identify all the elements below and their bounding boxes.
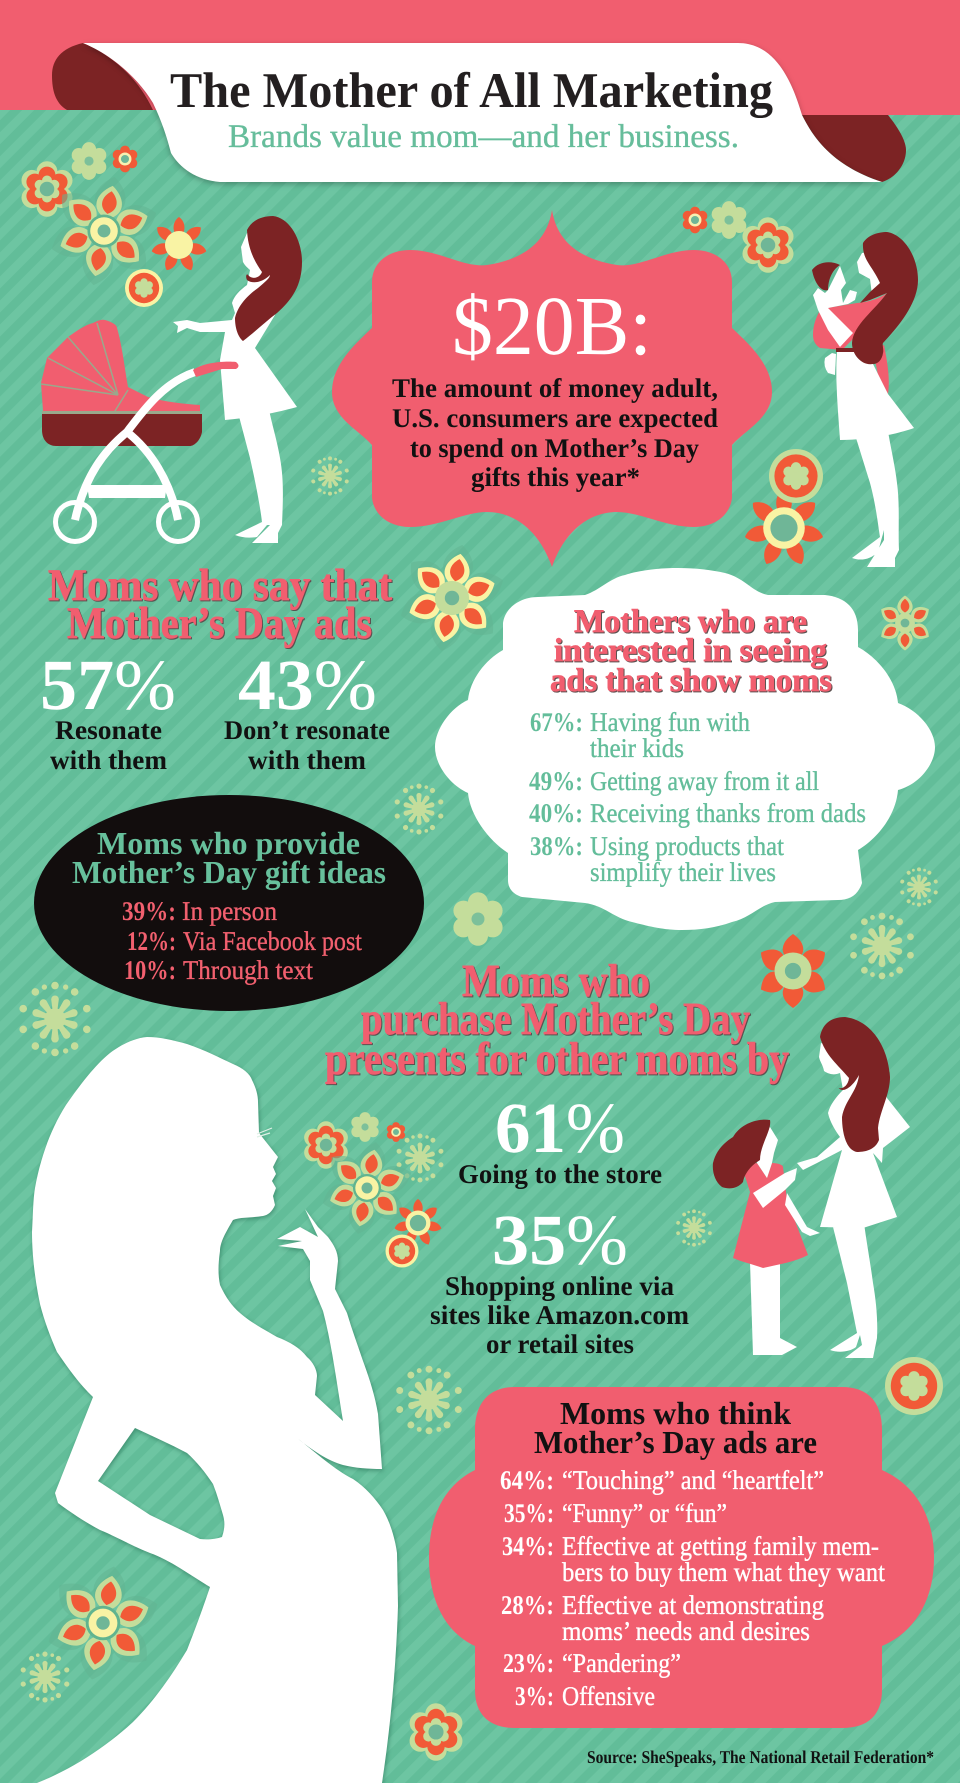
list (122, 896, 362, 985)
stroller (41, 320, 238, 542)
list: 3%: (515, 1681, 554, 1711)
flowers: top right cluster (683, 201, 794, 273)
list: 40%: (529, 798, 583, 828)
heading: Moms who think (560, 1395, 791, 1431)
stat: 61% (458, 1088, 662, 1189)
icon: eyelash (257, 1128, 272, 1137)
list: their kids (590, 733, 684, 763)
list: Effective at demonstrating (562, 1590, 824, 1620)
disc flower right (885, 1357, 943, 1415)
list: 38%: (530, 831, 583, 861)
heading: Moms who provide (97, 825, 360, 861)
list: Getting away from it all (590, 766, 819, 796)
woman holding baby (812, 232, 918, 567)
description: U.S. consumers are expected (392, 403, 718, 433)
plaque: $20B (332, 210, 772, 567)
list: 49%: (529, 766, 583, 796)
woman with stroller (41, 216, 302, 543)
stat: 61%: 61% (495, 1088, 625, 1168)
heading: moms who say: Mother’s Day ads (67, 598, 372, 648)
stat: 43%: 43% (238, 645, 377, 725)
list: Effective at getting family mem- (562, 1531, 879, 1561)
list: 35%: (504, 1498, 554, 1528)
mother and daughter (713, 1017, 910, 1358)
list: “Touching” and “heartfelt” (562, 1465, 824, 1495)
description: gifts this year* (471, 462, 640, 492)
list: simplify their lives (590, 857, 776, 887)
flowers: top left cluster (21, 142, 208, 307)
list: bers to buy them what they want (562, 1557, 885, 1587)
heading: moms who purchase: presents for other moms by (325, 1033, 789, 1084)
stat: 61%: Going to the store (458, 1159, 662, 1189)
heading: moms who purchase: Moms who (462, 955, 650, 1006)
silhouette: pregnant woman (32, 1037, 398, 1783)
description: to spend on Mother’s Day (410, 433, 699, 463)
list: 10%: (124, 955, 176, 985)
decorative burst (311, 456, 349, 496)
list: moms’ needs and desires (562, 1616, 810, 1646)
subtitle: Brands value mom—and her business. (228, 119, 739, 155)
stat: 35% (430, 1200, 690, 1359)
list: 28%: (501, 1590, 554, 1620)
heading: moms who say: Moms who say that (48, 560, 392, 610)
heading: moms who purchase: purchase Mother’s Day (361, 993, 750, 1044)
flowers: lower right of plaque (743, 449, 825, 567)
heading: moms who say (48, 560, 392, 648)
title ribbon (52, 43, 906, 182)
list: Using products that (590, 831, 784, 861)
pink top band (0, 0, 960, 115)
stat: 35%: or retail sites (486, 1329, 634, 1359)
list: 12%: (127, 926, 176, 956)
mother (797, 1043, 910, 1358)
stat: 57%: Resonate (55, 715, 162, 745)
heading: moms who purchase (325, 955, 789, 1084)
list: Offensive (562, 1681, 655, 1711)
list (529, 707, 866, 887)
small flower right (877, 596, 933, 650)
heading: Mother’s Day gift ideas (72, 854, 386, 891)
list: “Funny” or “fun” (562, 1498, 727, 1528)
list (500, 1465, 885, 1711)
list: Having fun with (590, 707, 750, 737)
description: The amount of money adult, (392, 373, 718, 403)
stat: 35%: sites like Amazon.com (430, 1300, 690, 1330)
panel: mothers interested in seeing ads (435, 568, 935, 930)
title: The Mother of All Marketing (170, 62, 773, 119)
heading: ads that show moms (550, 663, 832, 699)
list: 34%: (502, 1531, 554, 1561)
list: “Pandering” (562, 1648, 681, 1678)
burst left of panel (395, 1366, 463, 1434)
heading: Mother’s Day ads are (534, 1424, 817, 1460)
list: 23%: (503, 1648, 554, 1678)
stat: 43% (224, 645, 390, 775)
stat: 43%: with them (248, 745, 367, 775)
heading: interested in seeing (554, 633, 827, 669)
panel: moms who think (429, 1387, 934, 1728)
list: 39%: (122, 896, 176, 926)
heading (72, 825, 386, 891)
heading (534, 1395, 817, 1460)
flowers: by the face (304, 1112, 712, 1268)
stat: 35%: Shopping online via (445, 1271, 674, 1301)
heading: Mothers who are (574, 604, 807, 640)
stat: 57% (40, 645, 176, 775)
list: Through text (183, 955, 313, 985)
list: Receiving thanks from dads (590, 798, 866, 828)
description (392, 373, 718, 492)
flowers: lower left (20, 1563, 462, 1761)
heading (550, 604, 832, 699)
stat: 57%: with them (50, 745, 168, 775)
list: Via Facebook post (183, 926, 362, 956)
stat: 57%: 57% (40, 645, 176, 725)
panel: gift ideas ellipse (34, 795, 424, 1011)
bursts and flowers: middle (18, 784, 938, 1056)
list: 64%: (500, 1465, 554, 1495)
list: In person (182, 896, 277, 926)
stat: 35%: 35% (492, 1200, 628, 1280)
daughter (750, 1262, 797, 1355)
list: 67%: (530, 707, 583, 737)
big figure: $20B: (452, 280, 652, 373)
stat: 43%: Don’t resonate (224, 715, 390, 745)
flower beside heading (396, 542, 508, 654)
